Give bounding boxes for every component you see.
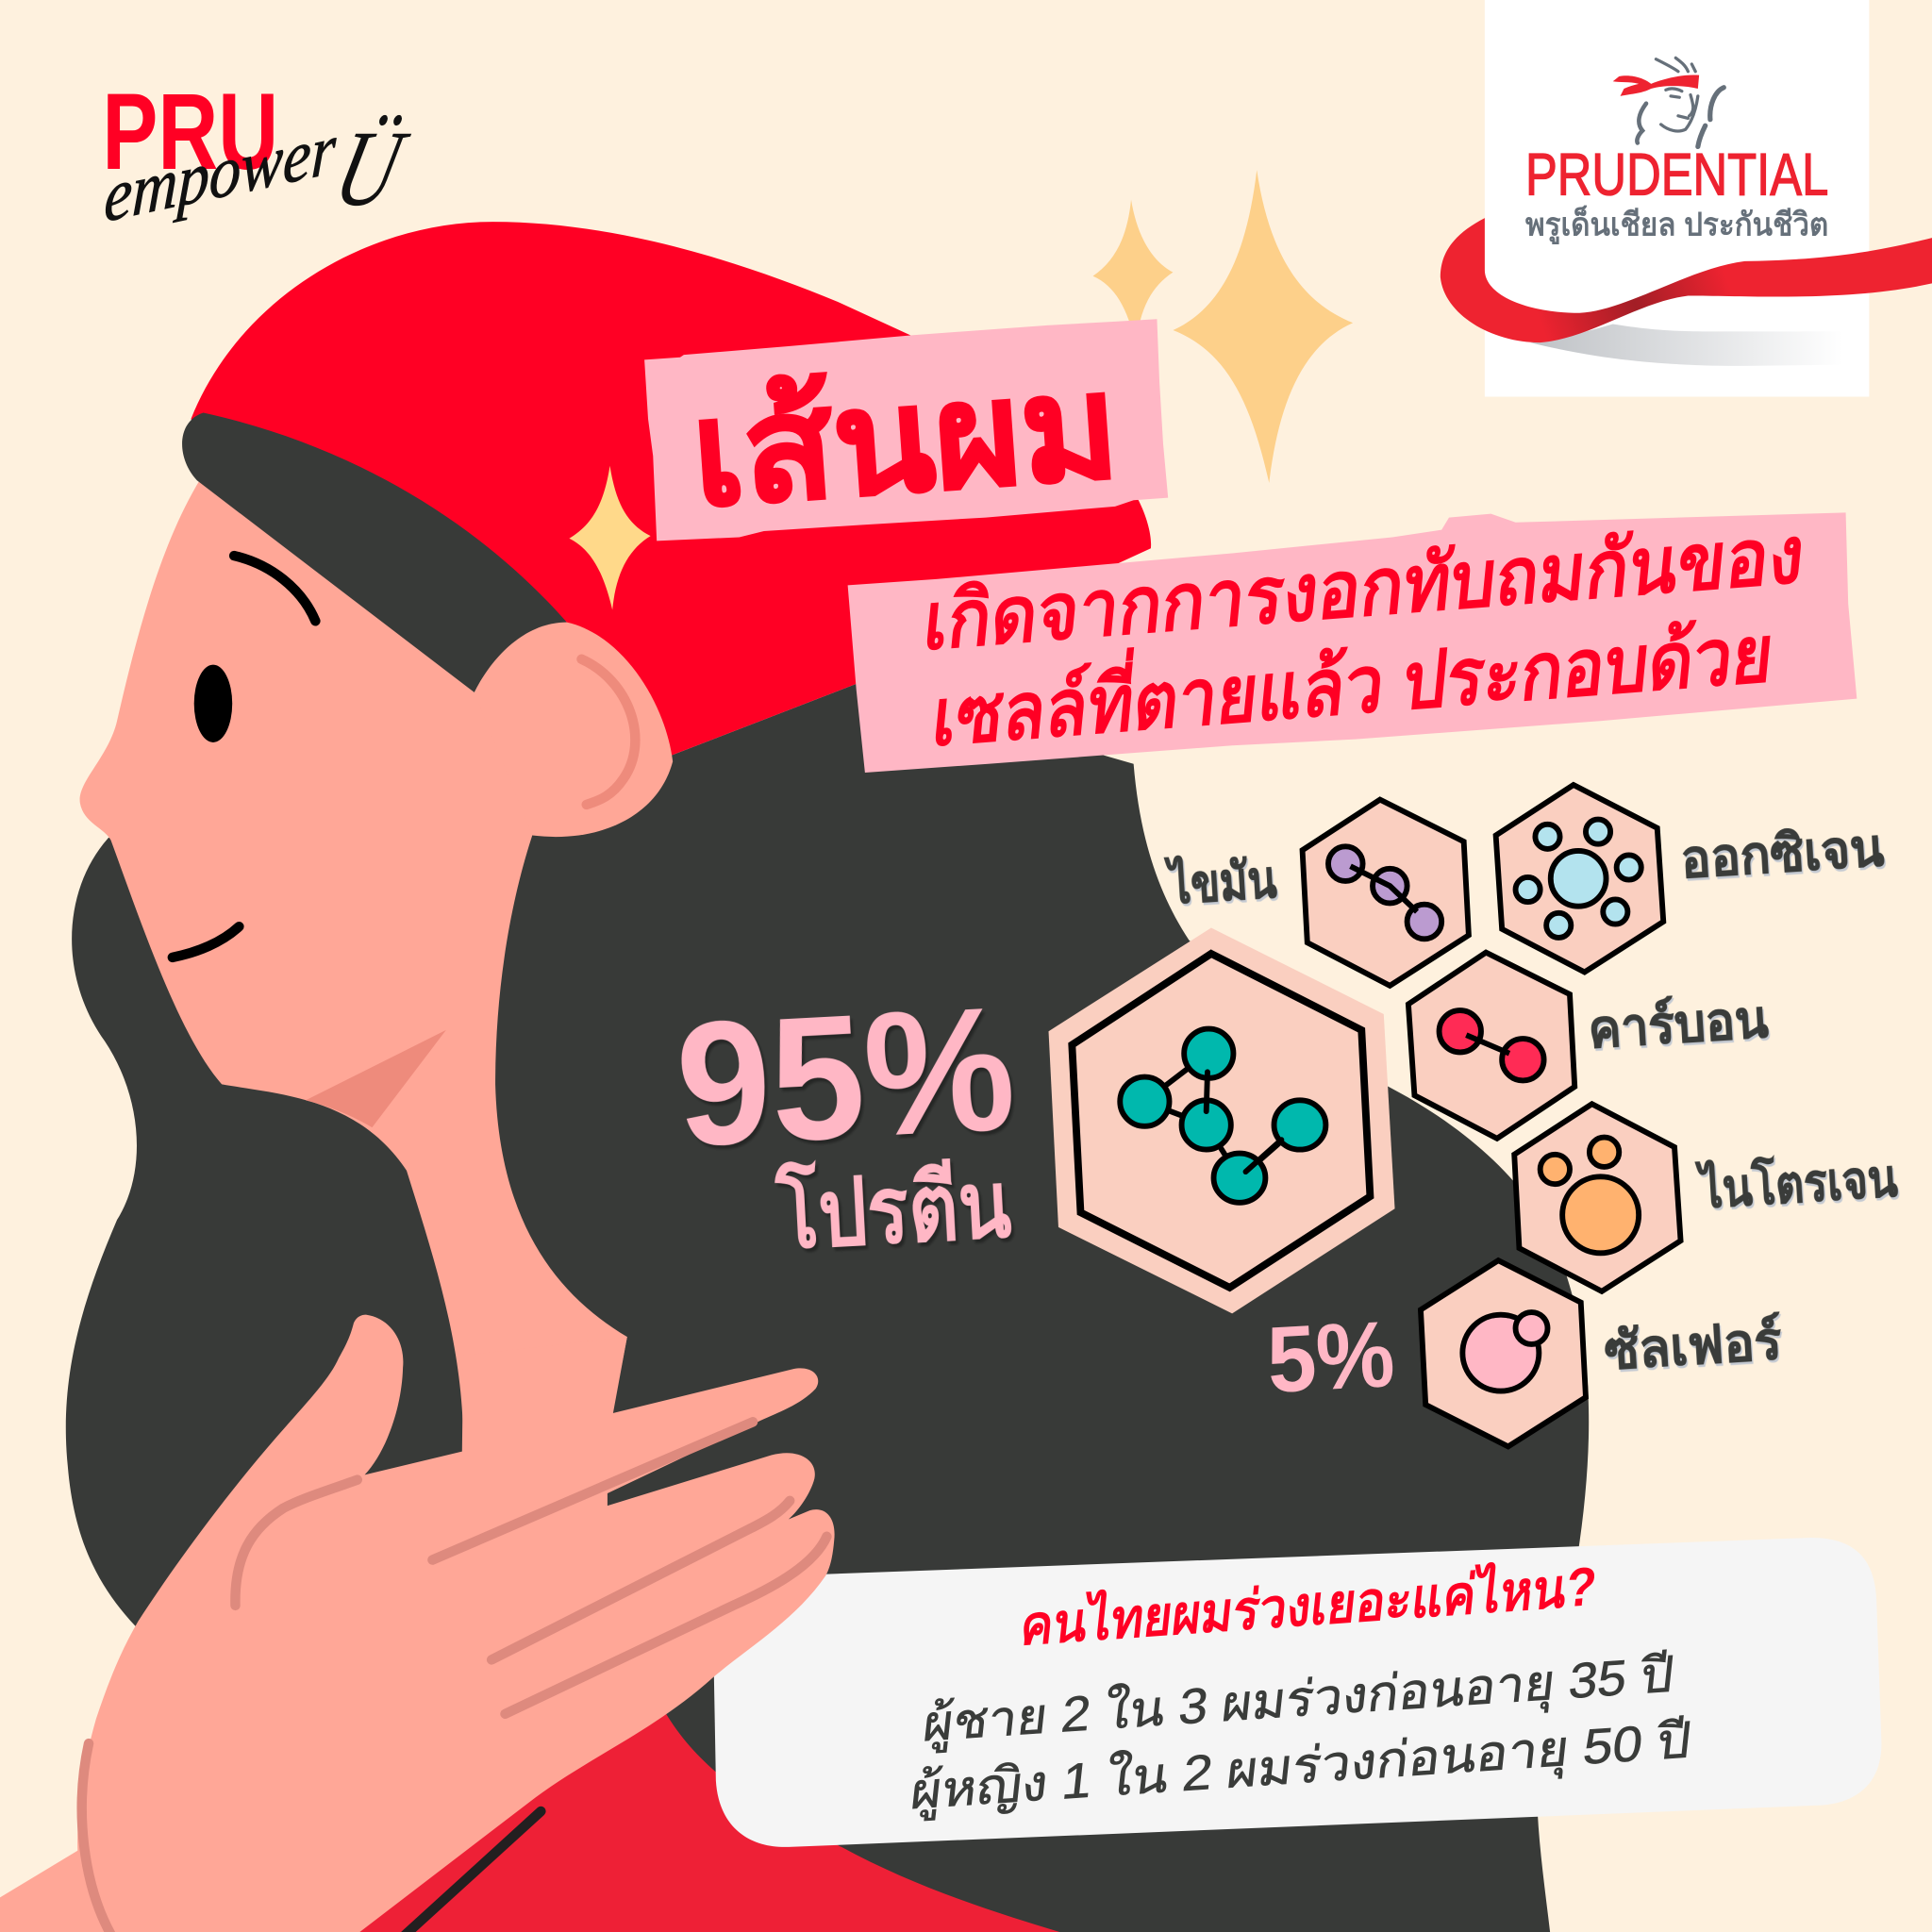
hexagon shape [1408,953,1574,1139]
molecule bonds [1144,1054,1300,1178]
card: hair loss in Thailand [712,1538,1881,1847]
molecule [1541,1138,1639,1253]
white logo panel [1485,0,1869,397]
ear [475,623,673,837]
molecule [1516,820,1641,938]
neck shadow [306,1030,446,1127]
logo: Prudential [1441,0,1932,397]
shirt collar line [403,1811,541,1932]
hexagon shape [1303,800,1469,986]
sparkle: medium [1093,200,1173,345]
eye [194,665,232,742]
subtitle line 2: เซลล์ที่ตายแล้ว ประกอบด้วย [928,597,1779,762]
mouth [173,926,239,958]
label: carbon: คาร์บอน [1587,990,1770,1058]
mercury head emblem [1613,58,1724,146]
hexagon: fat [1303,800,1469,986]
protein label: โปรตีน [774,1149,1013,1269]
hexagon: carbon [1408,953,1574,1139]
PRU: PRU [102,72,278,192]
subtitle line 1: เกิดจากการงอกทับถมกันของ [920,509,1808,666]
sparkle: large [1173,170,1353,483]
hexagon: protein [1049,928,1395,1313]
95%: 95% [672,969,1019,1184]
eyebrow [234,556,315,621]
thumb crease [235,1480,358,1606]
title banner [644,319,1168,541]
illustration: woman with long hair [66,222,1589,1932]
label: fat: ไขมัน [1164,849,1278,915]
finger crease 3 [506,1537,826,1714]
pink banner shape [848,512,1857,773]
finger crease 1 [432,1422,753,1560]
empower: empower [103,107,338,238]
card line 1: ผู้ชาย 2 ใน 3 ผมร่วงก่อนอายุ 35 ปี [920,1646,1676,1755]
label: sulfur: ซัลเฟอร์ [1603,1311,1784,1380]
dark fringe [182,413,567,692]
finger crease 2 [491,1501,790,1659]
inner ear [581,659,635,805]
molecule [1328,846,1441,939]
label: nitrogen: ไนโตรเจน [1694,1147,1899,1219]
card heading: คนไทยผมร่วงเยอะแค่ไหน? [1018,1555,1600,1657]
red shirt [333,1713,1059,1932]
subtitle banner [848,509,1857,773]
label: oxygen: ออกซิเจน [1679,818,1886,889]
red hair top [191,222,1151,756]
pink banner shape [644,319,1168,541]
U with dots: Ü [325,108,418,228]
inner hexagon [1072,954,1370,1288]
sparkle: small [569,466,651,610]
hexagon: nitrogen [1514,1104,1681,1291]
card line 2: ผู้หญิง 1 ใน 2 ผมร่วงก่อนอายุ 50 ปี [908,1711,1693,1822]
red ribbon [1441,218,1932,342]
statistic: 5%: 5% [1265,1302,1397,1413]
wrist crease [82,1743,111,1932]
molecule atoms [1120,1029,1325,1203]
wordmark: PRUDENTIAL [1525,142,1828,208]
molecule [1462,1312,1547,1391]
logo: PRU empower U [102,72,418,238]
statistic: 95% protein [672,969,1019,1269]
hexagon: sulfur [1421,1260,1586,1446]
hexagon: oxygen [1496,785,1663,973]
title text: เส้นผม [687,343,1124,536]
ribbon shadow [1530,325,1843,366]
hexagon shape [1496,785,1663,973]
face and neck [80,475,627,1460]
front bonds [1207,1072,1281,1172]
molecule [1440,1010,1544,1080]
hexagon shape [1514,1104,1681,1291]
headband [1613,75,1699,96]
hand shape [0,1315,835,1932]
card background [712,1538,1881,1847]
illustration: hand on neck [0,1315,835,1932]
Thai wordmark: พรูเด็นเชียล ประกันชีวิต [1525,204,1828,244]
long dark hair [66,684,1589,1932]
hexagon shape [1421,1260,1586,1446]
outer hexagon [1049,928,1395,1313]
hair and face strokes [1637,58,1724,146]
